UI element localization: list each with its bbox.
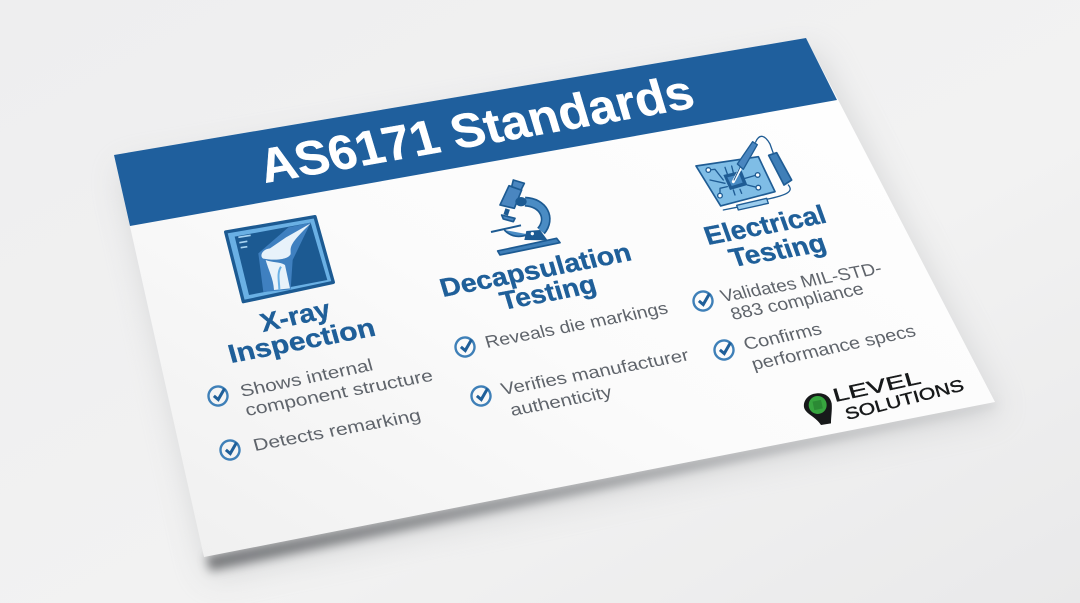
logo: Level Solutions: SOLUTIONS	[843, 376, 966, 424]
bullet: internal structure: Shows internal	[238, 355, 375, 401]
icon: microscope	[491, 180, 560, 255]
sheet contact shadow	[206, 402, 996, 571]
heading: X-ray	[257, 295, 334, 338]
icon: x-ray	[226, 217, 333, 302]
column: X-ray Inspection	[207, 217, 435, 461]
bullet: authenticity: Verifies manufacturer	[499, 345, 692, 399]
paper sheet	[114, 38, 995, 557]
title: AS6171 Standards	[252, 65, 700, 194]
bullet: MIL-STD-883: Validates MIL-STD-	[717, 258, 884, 306]
bullet: performance specs: performance specs	[748, 320, 918, 374]
icon: check	[454, 336, 476, 358]
icon: check	[692, 290, 714, 312]
bullet: die markings: Reveals die markings	[483, 299, 670, 352]
bullet: remarking	[219, 406, 423, 461]
bullet: performance specs: Confirms	[740, 318, 824, 354]
bullet: authenticity	[470, 345, 692, 420]
icon: check	[207, 385, 229, 407]
bullet: MIL-STD-883	[692, 258, 884, 324]
bullet: performance specs	[713, 318, 918, 374]
icon: circuit board and probes	[696, 136, 792, 210]
bullet: internal structure: component structure	[243, 366, 435, 420]
column: Decapsulation Testing	[437, 180, 692, 420]
column: Decapsulation Testing: Testing	[497, 271, 600, 316]
logo: Level Solutions: LEVEL	[830, 367, 923, 406]
header band	[114, 38, 837, 226]
column: Electrical Testing: Testing	[725, 228, 830, 273]
bullet: authenticity: authenticity	[508, 382, 615, 420]
icon: check	[219, 439, 241, 461]
heading: Electrical	[700, 199, 830, 251]
column: Electrical Testing	[692, 136, 918, 374]
icon: check	[713, 339, 735, 361]
heading: Decapsulation	[437, 239, 635, 303]
bullet: MIL-STD-883: 883 compliance	[727, 278, 866, 324]
icon: check	[470, 385, 492, 407]
sheet soft shadow	[120, 50, 1000, 578]
bullet: die markings	[454, 299, 670, 358]
bullet: internal structure	[207, 355, 435, 420]
icon: light bulb	[804, 393, 832, 425]
column: X-ray Inspection: Inspection	[225, 314, 379, 369]
logo: Level Solutions	[804, 367, 966, 425]
bullet: remarking: Detects remarking	[251, 406, 423, 455]
